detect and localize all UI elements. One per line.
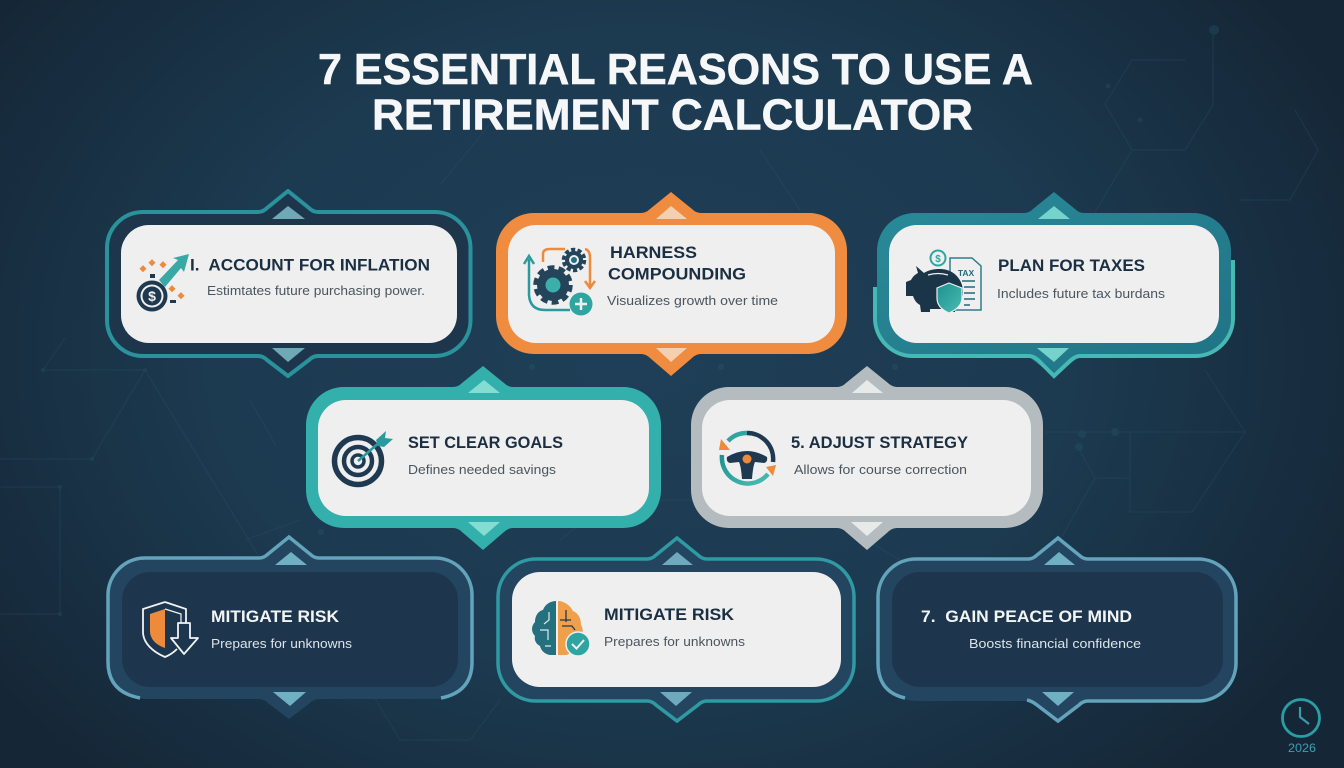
- panel: 1 account for inflation: [107, 191, 470, 376]
- text: heading 5: 5. ADJUST STRATEGY: [791, 433, 969, 452]
- text: description 2: Visualizes growth over time: [607, 293, 778, 308]
- text: heading 2: [608, 243, 746, 284]
- text: year: 2026: [1288, 743, 1316, 755]
- panel: 2 harness compounding: [496, 192, 847, 376]
- text: heading 4: SET CLEAR GOALS: [408, 433, 563, 452]
- panel: 8 gain peace of mind: [878, 538, 1236, 721]
- panel: 6 mitigate risk dark: [108, 537, 472, 719]
- panel: 3 plan for taxes: [875, 192, 1233, 376]
- icon: brain with check: [532, 601, 590, 656]
- text: heading 3: PLAN FOR TAXES: [998, 256, 1145, 275]
- icon: target with arrow: [334, 431, 393, 484]
- text: heading 6: MITIGATE RISK: [211, 607, 340, 626]
- text: description 8: Boosts financial confidence: [969, 636, 1141, 651]
- text: description 3: Includes future tax burdans: [997, 286, 1166, 301]
- text: heading 7: MITIGATE RISK: [604, 605, 735, 624]
- icon: piggy bank with tax document: TAX: [958, 268, 975, 278]
- title: RETIREMENT CALCULATOR: [372, 90, 973, 140]
- icon: steering wheel with arrows: [719, 433, 776, 484]
- text: heading 8: 7. GAIN PEACE OF MIND: [921, 607, 1132, 626]
- text: description 1: Estimtates future purchasing power.: [207, 283, 425, 298]
- panel: 5 adjust strategy: [691, 366, 1043, 550]
- text: heading 2: HARNESS: [610, 243, 697, 262]
- panel: 4 set clear goals: [306, 366, 661, 550]
- icon: gears with plus: [524, 249, 595, 316]
- text: description 4: Defines needed savings: [408, 462, 557, 477]
- text: heading 2: COMPOUNDING: [608, 264, 746, 284]
- icon: coin with rising arrow: $: [148, 288, 156, 304]
- title: 7 ESSENTIAL REASONS TO USE A: [318, 45, 1033, 94]
- text: description 5: Allows for course correction: [794, 462, 967, 477]
- icon: shield with down arrow: [143, 602, 198, 657]
- title: [318, 45, 1033, 140]
- icon: piggy bank with tax document: $: [935, 254, 941, 265]
- icon: piggy bank with tax document: [906, 250, 981, 313]
- icon: coin with rising arrow: [136, 254, 189, 312]
- panel: 7 mitigate risk light: [498, 538, 854, 721]
- text: heading 1: I. ACCOUNT FOR INFLATION: [190, 256, 430, 274]
- icon: clock: [1282, 700, 1320, 736]
- text: description 6: Prepares for unknowns: [211, 636, 353, 651]
- text: description 7: Prepares for unknowns: [604, 634, 746, 649]
